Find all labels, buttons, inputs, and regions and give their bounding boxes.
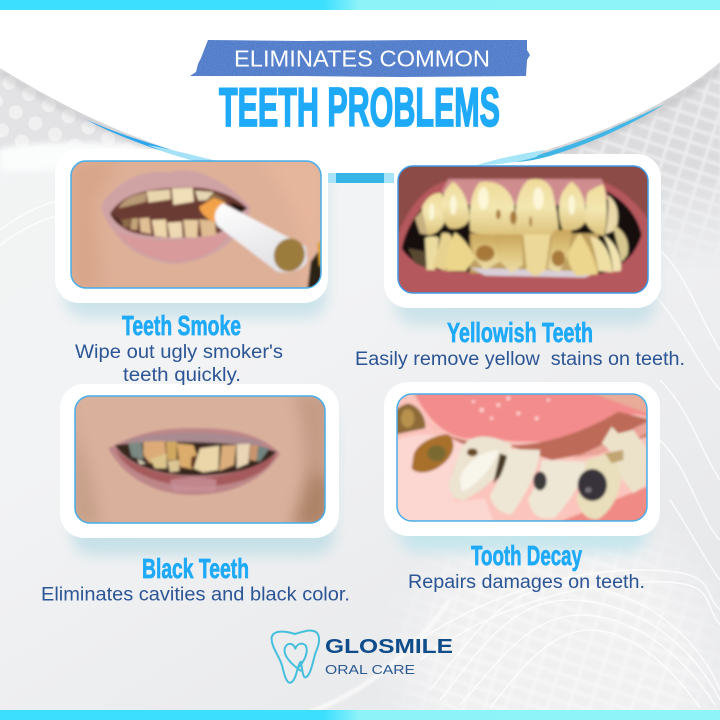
photo frame — [75, 396, 325, 523]
bottom bar — [0, 710, 720, 720]
brand name: GLOSMILE — [325, 636, 453, 658]
photo: black decayed teeth — [70, 393, 330, 527]
heading: Yellowish Teeth — [447, 317, 593, 348]
tape banner — [190, 40, 530, 77]
panel: black teeth — [60, 384, 339, 555]
icon: tooth with heart — [272, 631, 319, 683]
description: Eliminates cavities and black color. — [41, 584, 350, 606]
photo: smoker's mouth with cigarette — [70, 160, 323, 290]
banner text: ELIMINATES COMMON — [234, 46, 490, 72]
photo: yellow stained teeth — [395, 163, 652, 297]
label: yellowish teeth — [355, 317, 685, 370]
blue arc accents — [85, 104, 665, 183]
description: Repairs damages on teeth. — [408, 572, 645, 593]
heading: Tooth Decay — [471, 540, 582, 571]
brand logo — [272, 631, 453, 683]
label: teeth smoke — [75, 310, 283, 386]
label: tooth decay — [408, 540, 645, 593]
photo frame — [398, 166, 648, 293]
photo frame — [71, 161, 321, 288]
heading: Teeth Smoke — [122, 310, 241, 341]
top curved white header shape — [0, 0, 720, 177]
panel: yellowish teeth — [384, 154, 661, 325]
panel: tooth decay — [384, 382, 660, 552]
photo frame — [397, 394, 647, 521]
photo: tooth decay cavities — [393, 392, 652, 525]
description: Easily remove yellow stains on teeth. — [355, 349, 685, 370]
panel: teeth smoke — [55, 149, 328, 318]
description: teeth quickly. — [123, 365, 241, 386]
heading: Black Teeth — [142, 553, 249, 584]
description: Wipe out ugly smoker's — [75, 342, 283, 363]
top bar — [0, 0, 720, 10]
label: black teeth — [41, 553, 350, 606]
title: TEETH PROBLEMS — [219, 77, 500, 138]
brand subtitle: ORAL CARE — [325, 662, 415, 677]
